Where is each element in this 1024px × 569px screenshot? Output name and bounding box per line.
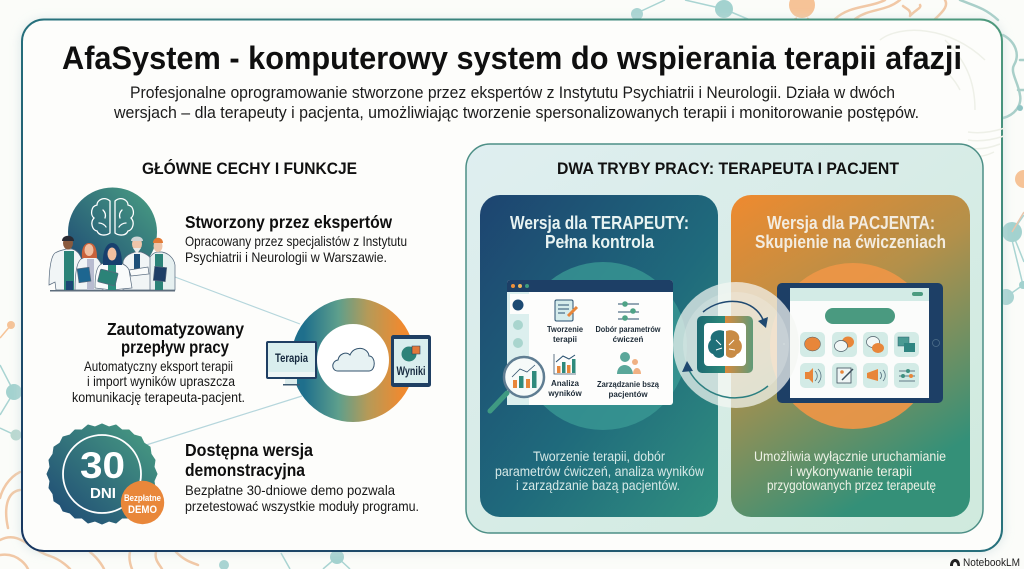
icon: monitor <box>266 341 317 386</box>
tablet: patient app <box>777 283 943 403</box>
text block: demo version: demonstracyjna <box>185 460 305 480</box>
window: therapist app: pacjentów <box>608 390 648 399</box>
icon: people <box>617 352 641 374</box>
icon: tablet <box>391 335 431 387</box>
heading: two modes: DWA TRYBY PRACY: TERAPEUTA I PACJENT <box>557 159 900 178</box>
window: therapist app <box>507 280 673 405</box>
window: therapist app: ćwiczeń <box>613 335 643 344</box>
window: therapist app: Tworzenie <box>547 325 584 334</box>
icon: small chart <box>554 354 576 374</box>
button <box>825 308 895 324</box>
badge: 30 days: DNI <box>90 485 116 502</box>
icons: speech bubbles <box>804 336 915 353</box>
window: therapist app: Dobór parametrów <box>596 325 661 334</box>
card: therapist version <box>480 195 718 517</box>
icon: document and pencil <box>555 300 577 321</box>
connector lines <box>143 277 302 446</box>
card: patient version: Umożliwia wyłącznie uruchamianie <box>754 448 946 464</box>
text block: automated workflow <box>72 319 245 405</box>
doctors <box>49 249 175 290</box>
icon tiles <box>800 332 919 388</box>
card: therapist version: Pełna kontrola <box>545 232 655 252</box>
panel: two working modes <box>466 144 983 533</box>
badge: 30 days: DEMO <box>128 504 157 516</box>
window: therapist app: wyników <box>547 389 582 398</box>
icons: sound, notes, megaphone, sliders <box>805 368 915 383</box>
text block: demo version: Bezpłatne 30-dniowe demo pozwala <box>185 482 395 498</box>
subtitle: Profesjonalne oprogramowanie stworzone przez ekspertów z Instytutu Psychiatrii i Neurologii. Działa w dwóch <box>130 83 895 102</box>
text block: automated workflow: przepływ pracy <box>121 337 229 357</box>
icon: central sync with brain app <box>673 282 799 408</box>
card: patient version: i wykonywanie terapii <box>790 463 912 479</box>
card: therapist version: i zarządzanie bazą pacjentów. <box>516 477 680 493</box>
text block: automated workflow: komunikację terapeuta-pacjent. <box>72 389 245 405</box>
icon: magnifying glass <box>490 357 544 411</box>
window: therapist app: Analiza <box>551 379 580 388</box>
badge: 30 days: Bezpłatne <box>124 493 161 503</box>
badge: 30 days <box>47 424 164 524</box>
text block: demo version: przetestować wszystkie moduły programu. <box>185 498 419 514</box>
text block: demo version: Dostępna wersja <box>185 440 313 460</box>
card: therapist version: parametrów ćwiczeń, analiza wyników <box>495 463 705 479</box>
text block: automated workflow: i import wyników upraszcza <box>87 373 235 389</box>
icon: monitor: Terapia <box>275 353 308 365</box>
text block: automated workflow: Automatyczny eksport terapii <box>84 358 233 374</box>
subtitle <box>113 83 919 122</box>
text block: experts: Psychiatrii i Neurologii w Warszawie. <box>185 249 387 265</box>
card: patient version: przygotowanych przez terapeutę <box>767 477 936 493</box>
icon: brain and doctors group <box>49 188 175 292</box>
card: therapist version: Tworzenie terapii, dobór <box>533 448 665 464</box>
heading: main features: GŁÓWNE CECHY I FUNKCJE <box>142 159 357 178</box>
icon: tablet: Wyniki <box>396 366 426 378</box>
card: patient version: Wersja dla PACJENTA: <box>767 213 935 233</box>
subtitle: wersjach – dla terapeuty i pacjenta, umożliwiając tworzenie spersonalizowanych terapii i monitorowanie postępów. <box>113 103 919 122</box>
text block: experts <box>185 212 407 265</box>
card: patient version <box>731 195 970 517</box>
badge: 30 days: 30 <box>80 445 125 486</box>
footer: NotebookLM mark: NotebookLM <box>963 557 1020 569</box>
diagram: workflow ring <box>266 311 431 409</box>
card: patient version: Skupienie na ćwiczeniach <box>755 232 946 252</box>
title: AfaSystem - komputerowy system do wspierania terapii afazji <box>62 40 962 76</box>
text block: demo version <box>185 440 419 514</box>
faint brain watermark inside card <box>880 30 1005 157</box>
window: therapist app: terapii <box>553 335 577 344</box>
text block: automated workflow: Zautomatyzowany <box>107 319 244 339</box>
text block: experts: Opracowany przez specjalistów z Instytutu <box>185 233 407 249</box>
icon: sliders <box>618 301 639 321</box>
icon: cloud <box>333 348 374 371</box>
text block: experts: Stworzony przez ekspertów <box>185 212 392 232</box>
window: therapist app: Zarządzanie bszą <box>597 380 660 389</box>
card: therapist version: Wersja dla TERAPEUTY: <box>510 213 689 233</box>
